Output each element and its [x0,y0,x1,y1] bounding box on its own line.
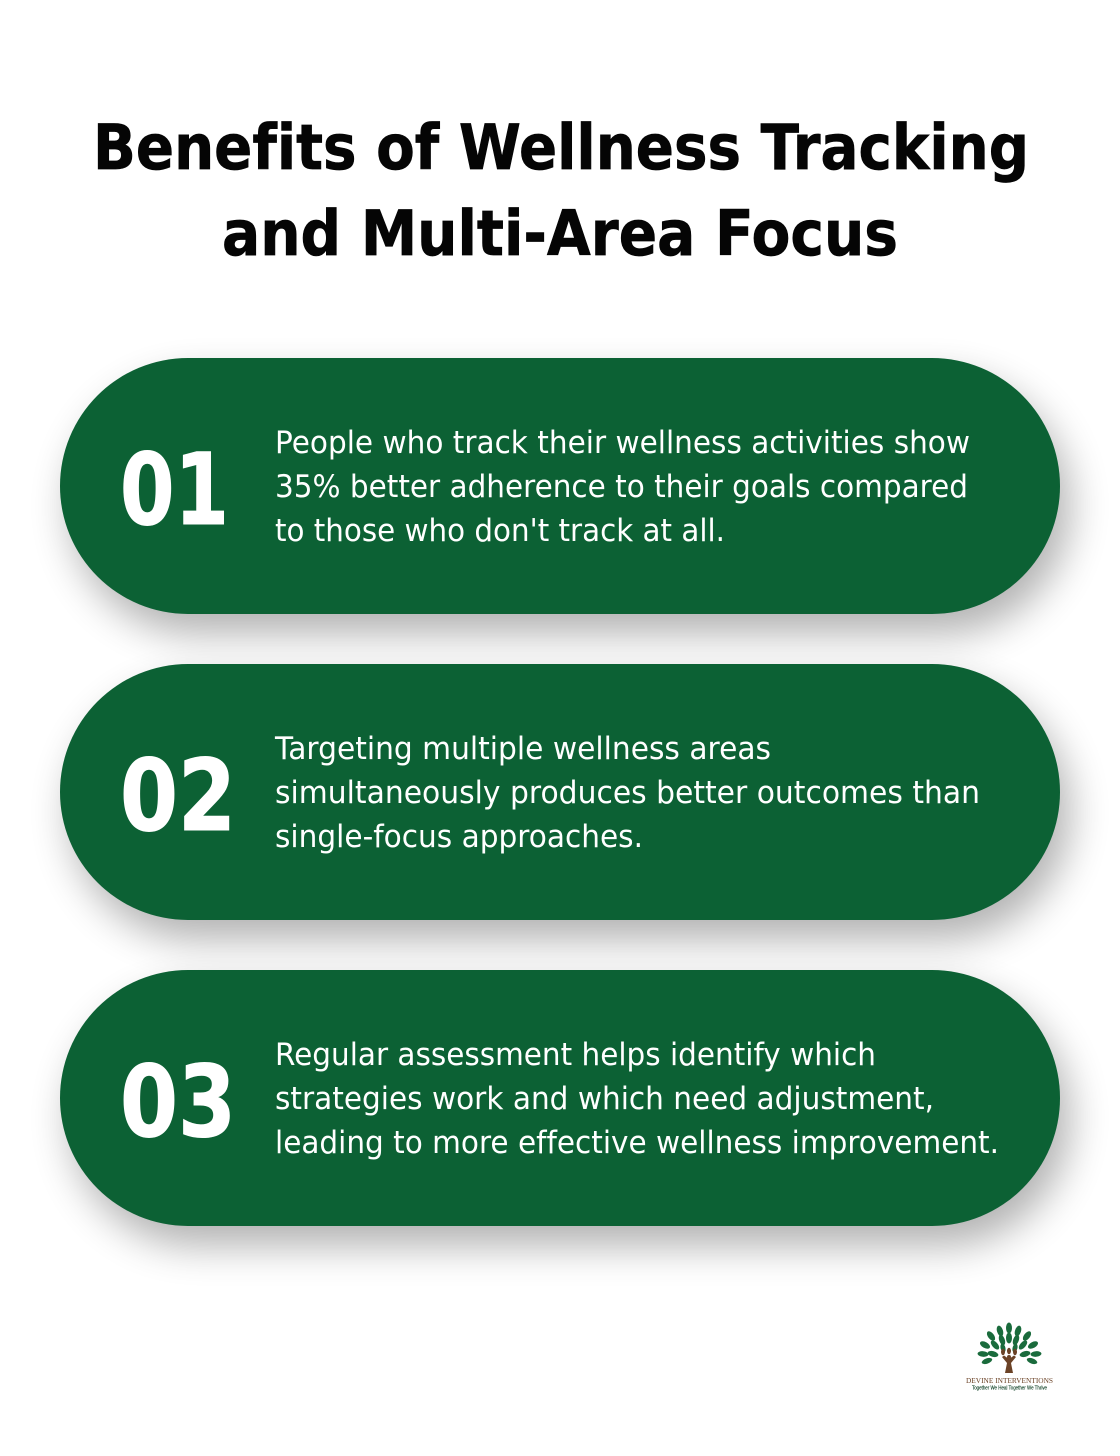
logo tagline: Together We Heal Together We Thrive [972,1386,1047,1392]
logo name: DEVINE INTERVENTIONS [966,1376,1053,1385]
text: benefit 01 [275,425,970,549]
number 02: 02 [120,739,236,854]
icon: tree [977,1322,1042,1373]
number 03: 03 [120,1045,236,1160]
text: benefit 02: Targeting multiple wellness areas [274,731,771,767]
logo: Devine Interventions [966,1322,1053,1392]
title [93,111,1029,270]
number 01: 01 [120,433,229,548]
text: benefit 02: single-focus approaches. [275,819,643,855]
text: benefit 03 [275,1037,999,1161]
text: benefit 03: leading to more effective wellness improvement. [275,1125,999,1161]
panel: benefit 01 [60,358,1070,634]
panel: benefit 03 [60,970,1070,1246]
text: benefit 01: 35% better adherence to their goals compared [275,469,968,505]
text: benefit 01: People who track their wellness activities show [275,425,970,461]
title: and Multi-Area Focus [222,197,898,270]
panel: benefit 02 [60,664,1070,940]
text: benefit 02 [274,731,980,855]
text: benefit 02: simultaneously produces better outcomes than [275,775,980,811]
text: benefit 03: Regular assessment helps identify which [275,1037,876,1073]
title: Benefits of Wellness Tracking [93,111,1029,184]
text: benefit 01: to those who don't track at all. [275,513,725,549]
text: benefit 03: strategies work and which need adjustment, [275,1081,934,1117]
